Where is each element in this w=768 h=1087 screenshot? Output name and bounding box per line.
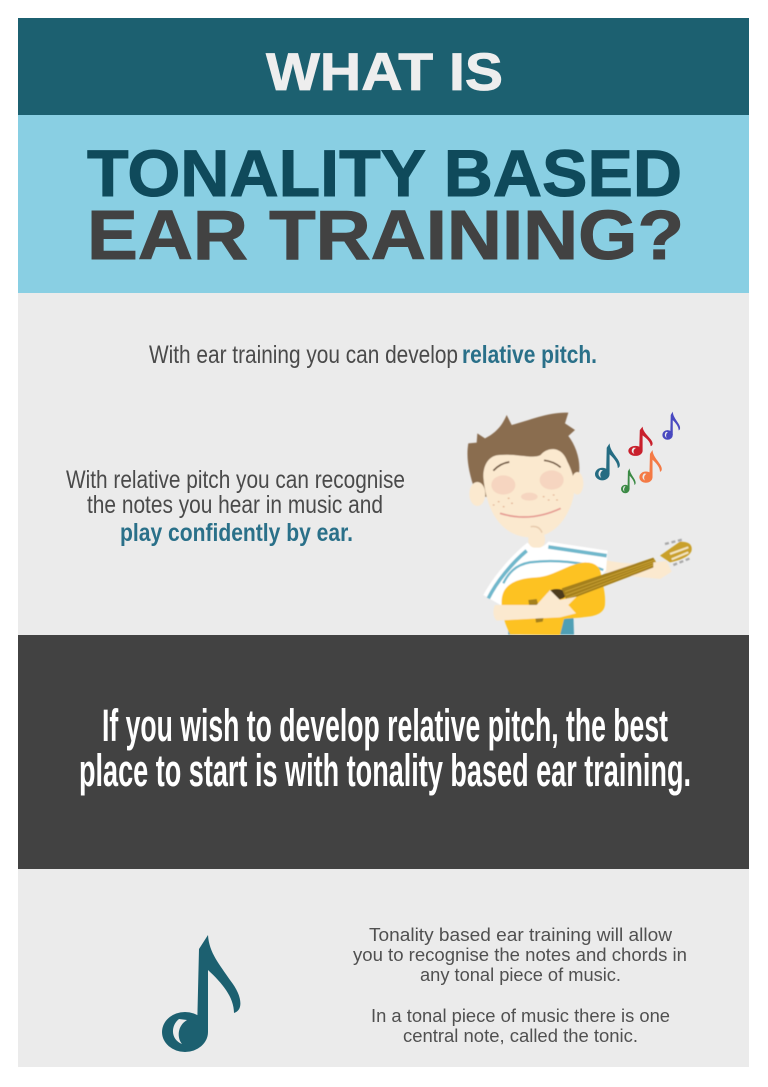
heading: ear training: EAR TRAINING?: [87, 196, 684, 274]
text: relative pitch description: play confidently by ear.: [120, 519, 353, 547]
icon: teal music note: [595, 443, 620, 480]
icon: red music note: [628, 427, 653, 456]
text: callout statement: [79, 700, 691, 796]
icon: blue music note: [662, 412, 680, 440]
text: tonality explanation: you to recognise the notes and chords in: [353, 945, 687, 965]
heading: what is: WHAT IS: [266, 43, 503, 102]
text: relative pitch description: the notes you hear in music and: [87, 491, 383, 519]
text: tonality explanation: Tonality based ear training will allow: [369, 925, 673, 945]
text: intro line: With ear training you can develop: [149, 341, 458, 369]
illustration: boy playing guitar: [467, 412, 692, 635]
panel: relative pitch: [18, 293, 749, 635]
text: tonality explanation: central note, called the tonic.: [403, 1026, 638, 1046]
icon: large music note: [162, 935, 240, 1052]
heading: tonality based: TONALITY BASED: [87, 136, 682, 210]
icon: green music note: [621, 468, 636, 493]
panel: dark callout: [18, 635, 749, 869]
text: tonality explanation: any tonal piece of music.: [420, 965, 621, 985]
text: intro line: relative pitch.: [462, 341, 597, 369]
panel: header what is: [18, 18, 749, 115]
text: tonality explanation: In a tonal piece of music there is one: [371, 1006, 670, 1026]
panel: title: [18, 115, 749, 293]
panel: tonality explanation: [18, 869, 749, 1067]
icon: orange music note: [639, 450, 662, 483]
text: tonality explanation: [353, 925, 687, 1046]
text: relative pitch description: With relative pitch you can recognise: [66, 466, 405, 494]
text: relative pitch description: [66, 466, 405, 547]
